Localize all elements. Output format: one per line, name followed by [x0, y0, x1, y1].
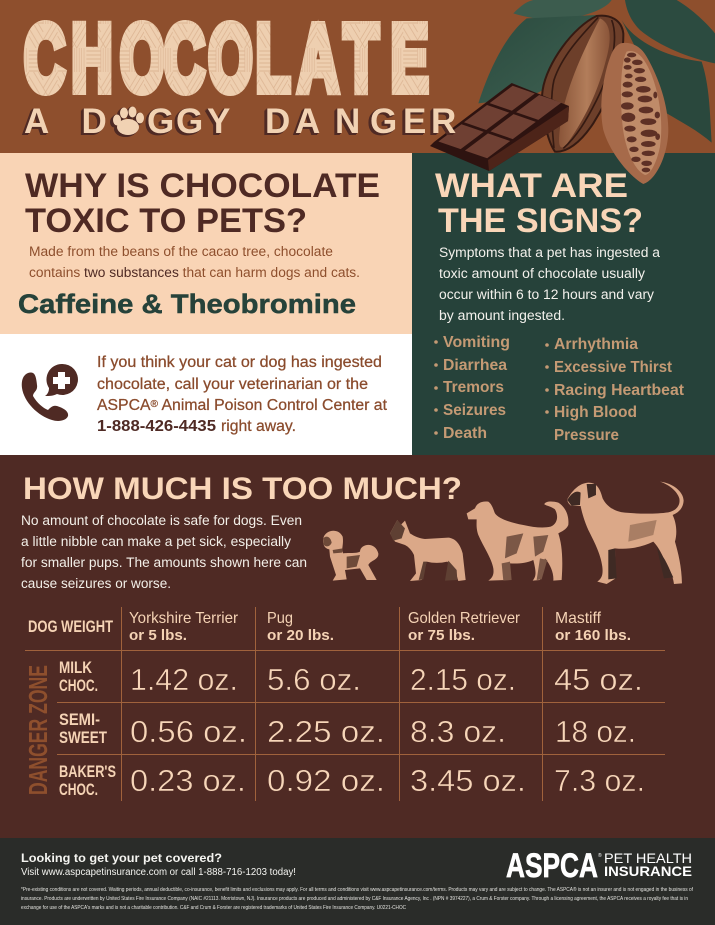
list: signs column one: Diarrhea — [443, 357, 507, 374]
column header: golden retriever: Golden Retriever — [408, 610, 521, 627]
list: signs column two: Racing Heartbeat — [554, 382, 684, 399]
icon: golden retriever — [467, 501, 568, 581]
text: call your veterinarian: ® — [151, 399, 159, 410]
row values: milk chocolate — [130, 662, 643, 697]
panel: how much is too much — [0, 455, 715, 838]
list: signs column one: Tremors — [443, 379, 504, 396]
text: no amount is safe: cause seizures or worse. — [21, 576, 171, 591]
heading: what are the signs: THE SIGNS? — [438, 202, 643, 240]
icon: mastiff — [567, 482, 684, 584]
list: signs column two: Pressure — [554, 427, 619, 444]
column header: yorkshire terrier: or 5 lbs. — [129, 627, 187, 644]
list: signs column two: Excessive Thirst — [554, 359, 672, 376]
column header: golden retriever — [408, 610, 521, 644]
icon: large left leaf — [478, 15, 597, 103]
panel: header background — [0, 0, 715, 153]
icon: pug — [390, 520, 466, 581]
column header: pug — [267, 610, 334, 644]
row label: semi-sweet: SEMI- — [59, 710, 100, 729]
list: signs column two: Arrhythmia — [554, 336, 638, 353]
row values: semi-sweet: 8.3 oz. — [410, 714, 506, 749]
row values: milk chocolate: 1.42 oz. — [130, 662, 238, 697]
text: call your veterinarian — [97, 354, 388, 435]
column header: mastiff: Mastiff — [555, 610, 602, 627]
text: symptoms description: Symptoms that a pet has ingested a — [439, 245, 661, 260]
list: signs column two — [545, 336, 684, 444]
text: call your veterinarian: right away. — [221, 418, 296, 435]
column header: pug: or 20 lbs. — [267, 627, 334, 644]
label: dog weight: DOG WEIGHT — [28, 617, 113, 636]
logo: ASPCA pet health insurance: ASPCA — [506, 847, 598, 885]
row label: milk chocolate — [59, 658, 98, 695]
heading: why is chocolate toxic: TOXIC TO PETS? — [25, 202, 307, 240]
column header: mastiff — [555, 610, 631, 644]
table: danger zone chart — [23, 607, 665, 801]
row values: baker's chocolate: 0.92 oz. — [267, 763, 385, 798]
text: cacao description: Made from the beans of the cacao tree, chocolate — [29, 244, 333, 259]
column header: yorkshire terrier — [129, 610, 239, 644]
panel: footer — [0, 838, 715, 925]
icon: right lower leaf — [622, 20, 712, 143]
text: no amount is safe — [21, 513, 307, 591]
logo: ASPCA pet health insurance: ® — [598, 852, 602, 859]
table grid lines — [25, 607, 665, 801]
text: symptoms description: toxic amount of chocolate usually — [439, 266, 645, 281]
row label: milk chocolate: MILK — [59, 658, 93, 677]
panel: poison control callout — [0, 334, 412, 455]
row values: semi-sweet: 0.56 oz. — [130, 714, 247, 749]
icon: small top leaf — [513, 0, 612, 20]
list: signs column one: Vomiting — [443, 334, 510, 351]
logo: ASPCA pet health insurance: PET HEALTH — [604, 850, 692, 866]
illustration: chocolate bar — [430, 83, 569, 171]
text: no amount is safe: No amount of chocolate is safe for dogs. Even — [21, 513, 302, 528]
list: signs column two: High Blood — [554, 404, 637, 421]
illustration: cacao leaves and pods — [478, 0, 715, 184]
row label: semi-sweet — [59, 710, 107, 747]
row values: milk chocolate: 5.6 oz. — [267, 662, 361, 697]
text: call your veterinarian: 1-888-426-4435 — [97, 418, 216, 435]
text: cacao description: contains two substances that can harm dogs and cats. — [29, 265, 360, 280]
row values: milk chocolate: 45 oz. — [554, 662, 643, 697]
text: call your veterinarian: Animal Poison Control Center at — [158, 397, 388, 414]
row values: baker's chocolate: 0.23 oz. — [130, 763, 246, 798]
column header: yorkshire terrier: Yorkshire Terrier — [129, 610, 239, 627]
footer: call to action: Visit www.aspcapetinsurance.com or call 1-888-716-1203 today! — [21, 867, 296, 878]
row values: baker's chocolate: 3.45 oz. — [410, 763, 526, 798]
heading: what are the signs: WHAT ARE — [435, 167, 628, 205]
illustration: four dogs by size — [323, 482, 684, 584]
row values: semi-sweet: 2.25 oz. — [267, 714, 385, 749]
text: call your veterinarian: ASPCA — [97, 397, 150, 414]
icon: yorkshire terrier — [323, 531, 378, 581]
column header: pug: Pug — [267, 610, 293, 627]
text: no amount is safe: a little nibble can make a pet sick, especially — [21, 534, 291, 549]
row label: baker's chocolate: BAKER'S — [59, 762, 116, 781]
row values: baker's chocolate: 7.3 oz. — [554, 763, 645, 798]
row label: milk chocolate: CHOC. — [59, 676, 98, 695]
column header: mastiff: or 160 lbs. — [555, 627, 631, 644]
text: call your veterinarian: chocolate, call your veterinarian or the — [97, 376, 368, 393]
footer: legal disclaimer — [21, 886, 693, 911]
heading: why is chocolate toxic — [25, 167, 380, 240]
row label: baker's chocolate: CHOC. — [59, 780, 98, 799]
icon: paw print — [113, 106, 144, 135]
icon: open cacao pod — [601, 43, 668, 184]
row values: semi-sweet — [130, 714, 636, 749]
text: no amount is safe: for smaller pups. The amounts shown here can — [21, 555, 307, 570]
callout: caffeine and theobromine: Caffeine & Theobromine — [18, 289, 356, 319]
text: call your veterinarian: If you think your cat or dog has ingested — [97, 354, 382, 371]
list: signs column one: Death — [443, 425, 487, 442]
list: signs column one — [434, 334, 510, 442]
row values: milk chocolate: 2.15 oz. — [410, 662, 516, 697]
column header: golden retriever: or 75 lbs. — [408, 627, 475, 644]
text: symptoms description: by amount ingested. — [439, 308, 565, 323]
panel: what are the signs — [412, 153, 715, 455]
logo: ASPCA pet health insurance — [506, 847, 692, 885]
row values: baker's chocolate — [130, 763, 645, 798]
list: signs column one: Seizures — [443, 402, 506, 419]
row label: semi-sweet: SWEET — [59, 728, 107, 747]
label: danger zone: DANGER ZONE — [23, 665, 53, 795]
icon: phone with medical cross bubble — [22, 364, 78, 421]
logo: ASPCA pet health insurance: INSURANCE — [604, 863, 692, 879]
heading: how much is too much: HOW MUCH IS TOO MUCH? — [23, 470, 462, 506]
title: CHOCOLATE: CHOCOLATE — [24, 4, 429, 111]
heading: what are the signs — [435, 167, 643, 240]
footer: legal disclaimer: exchange for use of the ASPCA's marks and is not a charitable contribution. C&F and Crum & Forster are registered trademarks of United States Fire Insurance Company. U0221-CHOC — [21, 905, 406, 911]
footer: call to action: Looking to get your pet covered? — [21, 851, 222, 865]
panel: why is chocolate toxic — [0, 153, 412, 334]
row label: baker's chocolate — [59, 762, 116, 799]
text: symptoms description: occur within 6 to 12 hours and vary — [439, 287, 654, 302]
text: cacao description — [29, 244, 360, 280]
heading: why is chocolate toxic: WHY IS CHOCOLATE — [25, 167, 380, 205]
footer: call to action — [21, 851, 296, 878]
subtitle: A Doggy Danger: A DGGY DANGER — [24, 102, 456, 141]
icon: closed cacao pod — [542, 16, 623, 152]
text: symptoms description — [439, 245, 661, 323]
icon: right top leaf — [625, 0, 715, 63]
row values: semi-sweet: 18 oz. — [555, 714, 636, 749]
